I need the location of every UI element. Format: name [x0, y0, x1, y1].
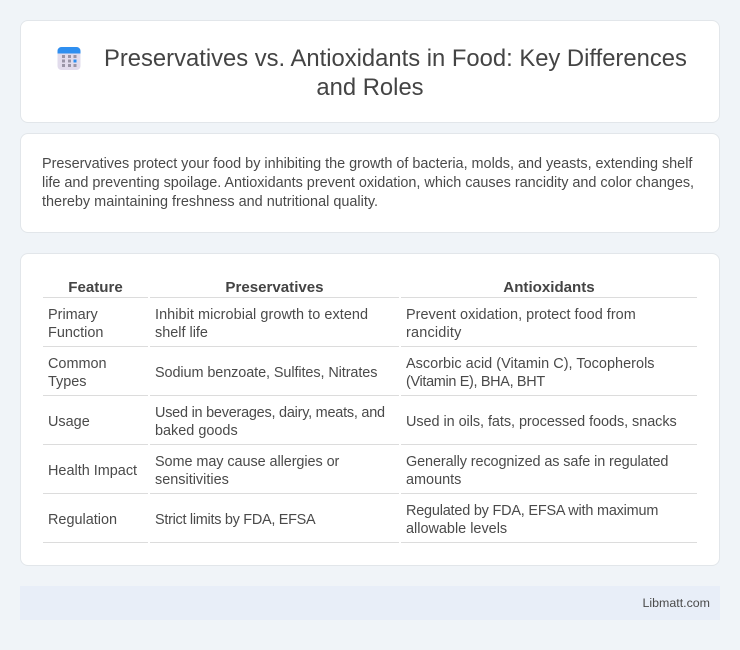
- title: [104, 45, 687, 101]
- cell: allowable levels: [406, 521, 507, 537]
- intro text: life and preventing spoilage. Antioxidants prevent oxidation, which causes rancidity and color changes,: [42, 175, 694, 191]
- cell: Used in oils, fats, processed foods, snacks: [406, 414, 677, 430]
- cell: Regulated by FDA, EFSA with maximum: [406, 503, 658, 519]
- cell: shelf life: [155, 325, 208, 341]
- cell: [155, 454, 340, 488]
- cell: Strict limits by FDA, EFSA: [155, 512, 315, 528]
- header: preservatives: Preservatives: [225, 279, 324, 296]
- row: usage: Usage: [48, 414, 90, 430]
- row: common types: Common: [48, 356, 107, 372]
- table card: [20, 253, 720, 566]
- row: health impact: Health Impact: [48, 463, 137, 479]
- cell: Inhibit microbial growth to extend: [155, 307, 368, 323]
- footer bar: [20, 586, 720, 620]
- cell: [406, 356, 655, 390]
- cell: Used in beverages, dairy, meats, and: [155, 405, 385, 421]
- cell: [155, 405, 385, 439]
- icon: calendar: [58, 47, 80, 70]
- cell: sensitivities: [155, 472, 229, 488]
- header: feature: Feature: [68, 279, 123, 296]
- title: Preservatives vs. Antioxidants in Food: Key Differences: [104, 45, 687, 72]
- cell: Generally recognized as safe in regulated: [406, 454, 668, 470]
- cell: Ascorbic acid (Vitamin C), Tocopherols: [406, 356, 655, 372]
- cell: baked goods: [155, 423, 238, 439]
- row: primary function: [48, 307, 103, 341]
- cell: [406, 454, 668, 488]
- cell: amounts: [406, 472, 461, 488]
- title card: [20, 20, 720, 123]
- cell: Prevent oxidation, protect food from: [406, 307, 636, 323]
- header: antioxidants: Antioxidants: [503, 279, 595, 296]
- cell: (Vitamin E), BHA, BHT: [406, 374, 545, 390]
- footer text: Libmatt.com: [643, 596, 710, 610]
- intro text: Preservatives protect your food by inhibiting the growth of bacteria, molds, and yeasts, extending shelf: [42, 156, 692, 172]
- row: common types: [48, 356, 107, 390]
- row: common types: Types: [48, 374, 87, 390]
- cell: [155, 307, 368, 341]
- intro text: [42, 156, 694, 210]
- cell: [406, 503, 658, 537]
- cell: [406, 307, 636, 341]
- title: and Roles: [316, 74, 424, 101]
- cell: Sodium benzoate, Sulfites, Nitrates: [155, 365, 377, 381]
- cell: rancidity: [406, 325, 462, 341]
- row: primary function: Primary: [48, 307, 98, 323]
- row: primary function: Function: [48, 325, 103, 341]
- cell: Some may cause allergies or: [155, 454, 339, 470]
- intro text: thereby maintaining freshness and nutritional quality.: [42, 194, 378, 210]
- intro card: [20, 133, 720, 233]
- row: regulation: Regulation: [48, 512, 117, 528]
